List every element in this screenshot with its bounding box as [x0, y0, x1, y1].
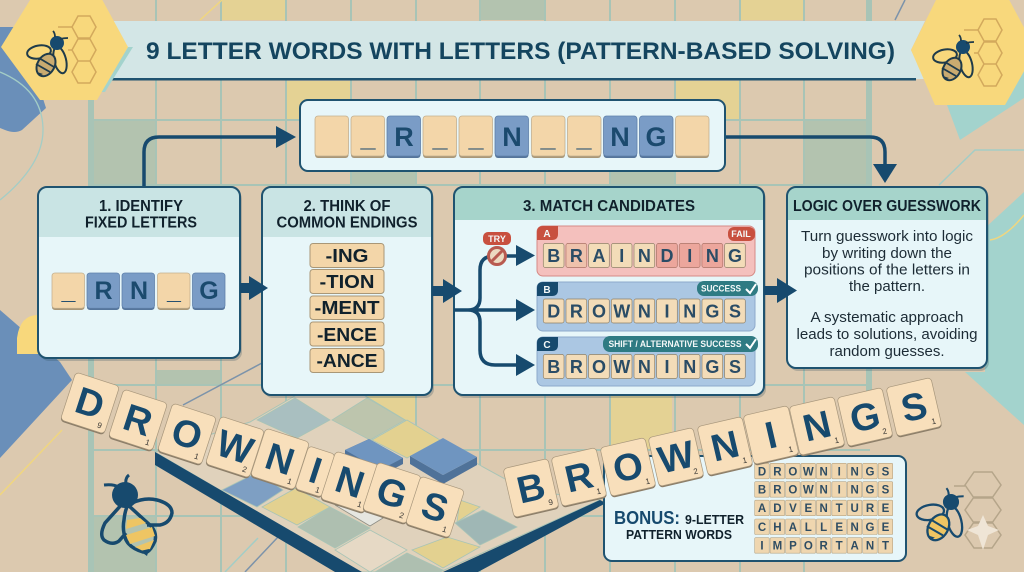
word tiles: BROWNINGS: G: [846, 394, 884, 442]
candidate A: braiding fail: FAIL: [731, 229, 751, 239]
candidate C: brownings alternative success: SHIFT / ALTERNATIVE SUCCESS: [608, 339, 742, 349]
icon: left hexagon with bee: [1, 0, 133, 100]
mini word grid: CHALLENGE: [758, 522, 890, 534]
mini word grid: BROWNINGS: [758, 485, 890, 497]
word tiles: DROWNINGS: [60, 372, 465, 539]
arrow: step 1 to step 2: [240, 276, 268, 300]
word tiles: DROWNINGS: R: [118, 397, 157, 445]
candidate B: drownings success: B: [543, 285, 551, 296]
word tiles: DROWNINGS: N: [260, 436, 299, 484]
panel: logic over guesswork: the pattern.: [849, 278, 925, 295]
panel: step 2 common endings: -TION: [320, 271, 374, 292]
panel: step 2 common endings: -MENT: [314, 297, 380, 318]
panel: bonus pattern words: PATTERN WORDS: [626, 527, 732, 542]
candidate A: braiding fail: A: [543, 229, 551, 240]
candidate A: braiding fail: [537, 226, 755, 276]
word tiles: BROWNINGS: N: [707, 423, 743, 471]
panel: step 3 match candidates: 3. MATCH CANDIDATES: [523, 198, 695, 215]
panel: step 1 identify fixed letters: _RN_G: [61, 277, 219, 305]
word tiles: DROWNINGS: O: [166, 410, 207, 459]
panel: step 2 common endings: -ENCE: [317, 324, 377, 345]
mini word grid: DROWNINGS: [758, 466, 890, 478]
word tiles: BROWNINGS: 1: [931, 416, 937, 426]
word tiles: BROWNINGS: R: [561, 454, 597, 502]
isometric board: [155, 375, 606, 572]
arrow: step 1 to pattern: [144, 126, 296, 187]
word tiles: BROWNINGS: I: [761, 414, 781, 458]
candidate C: brownings alternative success: [537, 336, 758, 386]
mini word grid: ADVENTURE: [758, 503, 890, 515]
word tiles: BROWNINGS: 1: [596, 486, 602, 496]
panel: step 1 identify fixed letters: [38, 187, 242, 361]
panel: step 3 match candidates: [454, 187, 766, 398]
word tiles: DROWNINGS: 1: [314, 485, 322, 495]
panel: logic over guesswork: positions of the letters in: [804, 262, 970, 278]
word tiles: DROWNINGS: 9: [96, 421, 104, 431]
word tiles: DROWNINGS: 1: [356, 500, 364, 510]
candidate B: drownings success: DROWNINGS: [547, 302, 741, 322]
word tiles: BROWNINGS: O: [609, 444, 647, 492]
word tiles: DROWNINGS: N: [330, 459, 369, 507]
icon: large bee bottom left: [102, 475, 172, 556]
arrow: step 2 to step 3: [432, 279, 462, 303]
candidate B: drownings success: [537, 281, 758, 331]
word tiles: BROWNINGS: B: [513, 465, 549, 513]
panel: logic over guesswork: leads to solutions, avoiding: [796, 326, 978, 343]
arrow: pattern to logic panel: [725, 137, 897, 183]
word tiles: BROWNINGS: W: [654, 433, 699, 482]
word tiles: BROWNINGS: [503, 377, 942, 519]
word tiles: BROWNINGS: 1: [834, 435, 840, 445]
try badge with prohibited icon: [483, 232, 511, 264]
panel: step 1 identify fixed letters: 1. IDENTIFY: [99, 198, 184, 215]
panel: logic over guesswork: A systematic approach: [810, 309, 964, 326]
branching arrows: [454, 245, 535, 376]
icon: right hexagon with bee: [911, 0, 1024, 105]
word tiles: DROWNINGS: 1: [441, 525, 449, 535]
word tiles: DROWNINGS: 1: [286, 477, 294, 487]
candidate B: drownings success: SUCCESS: [701, 284, 741, 294]
word tiles: DROWNINGS: 1: [144, 438, 152, 448]
panel: step 2 common endings: COMMON ENDINGS: [276, 214, 418, 232]
arrow: step 3 to logic panel: [764, 278, 797, 303]
panel: logic over guesswork: [787, 187, 989, 371]
title banner: 9 LETTER WORDS WITH LETTERS (PATTERN-BASED SOLVING): [146, 38, 895, 65]
panel: bonus pattern words: BONUS:: [614, 508, 680, 528]
panel: step 1 identify fixed letters: FIXED LETTERS: [85, 214, 197, 232]
word tiles: BROWNINGS: N: [799, 403, 835, 451]
word tiles: DROWNINGS: 2: [398, 511, 406, 521]
candidate C: brownings alternative success: BROWNINGS: [547, 357, 741, 377]
word tiles: DROWNINGS: I: [304, 449, 327, 492]
word tiles: DROWNINGS: 1: [193, 452, 201, 462]
panel: step 2 common endings: -ANCE: [316, 350, 378, 371]
panel: logic over guesswork: random guesses.: [830, 343, 944, 360]
mini word grid: [755, 463, 893, 553]
icon: small bee and honeycomb bottom right: [915, 472, 1001, 550]
word tiles: BROWNINGS: S: [897, 385, 931, 431]
word tiles: DROWNINGS: G: [371, 469, 412, 518]
word tiles: BROWNINGS: 1: [742, 455, 748, 465]
title banner: [108, 21, 925, 80]
mini word grid: IMPORTANT: [760, 541, 889, 553]
panel: bonus pattern words: 9-LETTER: [685, 512, 745, 527]
try badge with prohibited icon: TRY: [488, 234, 506, 244]
panel: pattern strip: _R__N__NG: [359, 122, 667, 152]
word tiles: BROWNINGS: 1: [645, 476, 651, 486]
word tiles: BROWNINGS: 2: [693, 466, 699, 476]
panel: logic over guesswork: LOGIC OVER GUESSWORK: [793, 198, 982, 215]
word tiles: DROWNINGS: S: [416, 484, 453, 532]
word tiles: BROWNINGS: 1: [788, 444, 794, 454]
panel: pattern strip: [300, 100, 725, 171]
word tiles: DROWNINGS: 2: [241, 465, 249, 475]
word tiles: BROWNINGS: 9: [548, 497, 554, 507]
candidate C: brownings alternative success: C: [543, 340, 551, 351]
word tiles: DROWNINGS: D: [70, 380, 109, 428]
word tiles: BROWNINGS: 2: [882, 426, 888, 436]
candidate A: braiding fail: BRAINDING: [547, 246, 742, 266]
panel: logic over guesswork: by writing down the: [822, 245, 952, 262]
word tiles: DROWNINGS: W: [211, 422, 258, 474]
panel: bonus pattern words: [604, 456, 906, 561]
panel: step 2 common endings: [262, 187, 434, 398]
panel: step 2 common endings: 2. THINK OF: [304, 198, 390, 215]
panel: step 2 common endings: -ING: [326, 245, 368, 266]
panel: logic over guesswork: Turn guesswork into logic: [801, 228, 973, 245]
